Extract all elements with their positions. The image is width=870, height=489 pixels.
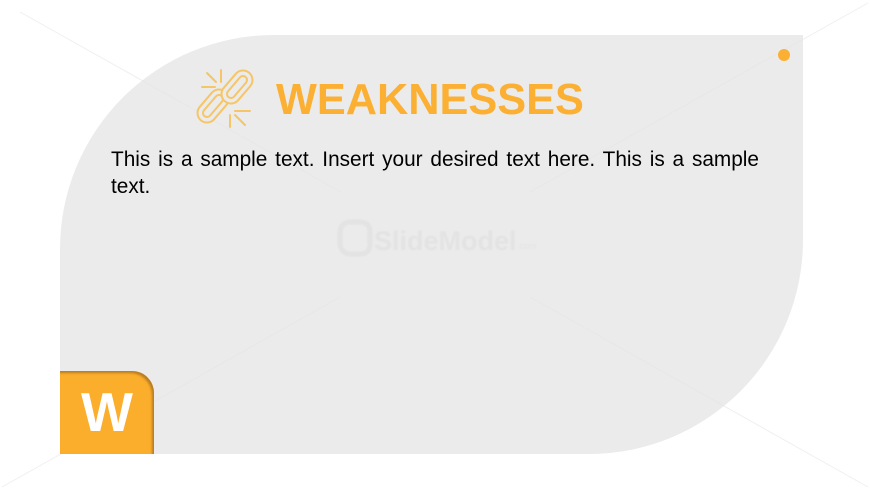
body text: This is a sample text. Insert your desired text here. This is a sample xyxy=(111,148,759,171)
panel: leaf-shaped background xyxy=(60,35,803,454)
icon: broken chain link xyxy=(196,69,254,128)
body text xyxy=(111,148,759,198)
badge: W: W xyxy=(81,381,133,443)
body text: text. xyxy=(111,175,150,198)
badge: W xyxy=(60,371,154,454)
watermark: SlideModel logo: SlideModel xyxy=(374,226,517,256)
heading: WEAKNESSES: WEAKNESSES xyxy=(276,76,584,124)
watermark: SlideModel logo: .com xyxy=(517,241,537,251)
icon: orange dot xyxy=(778,49,790,61)
watermark: SlideModel logo xyxy=(337,218,539,258)
